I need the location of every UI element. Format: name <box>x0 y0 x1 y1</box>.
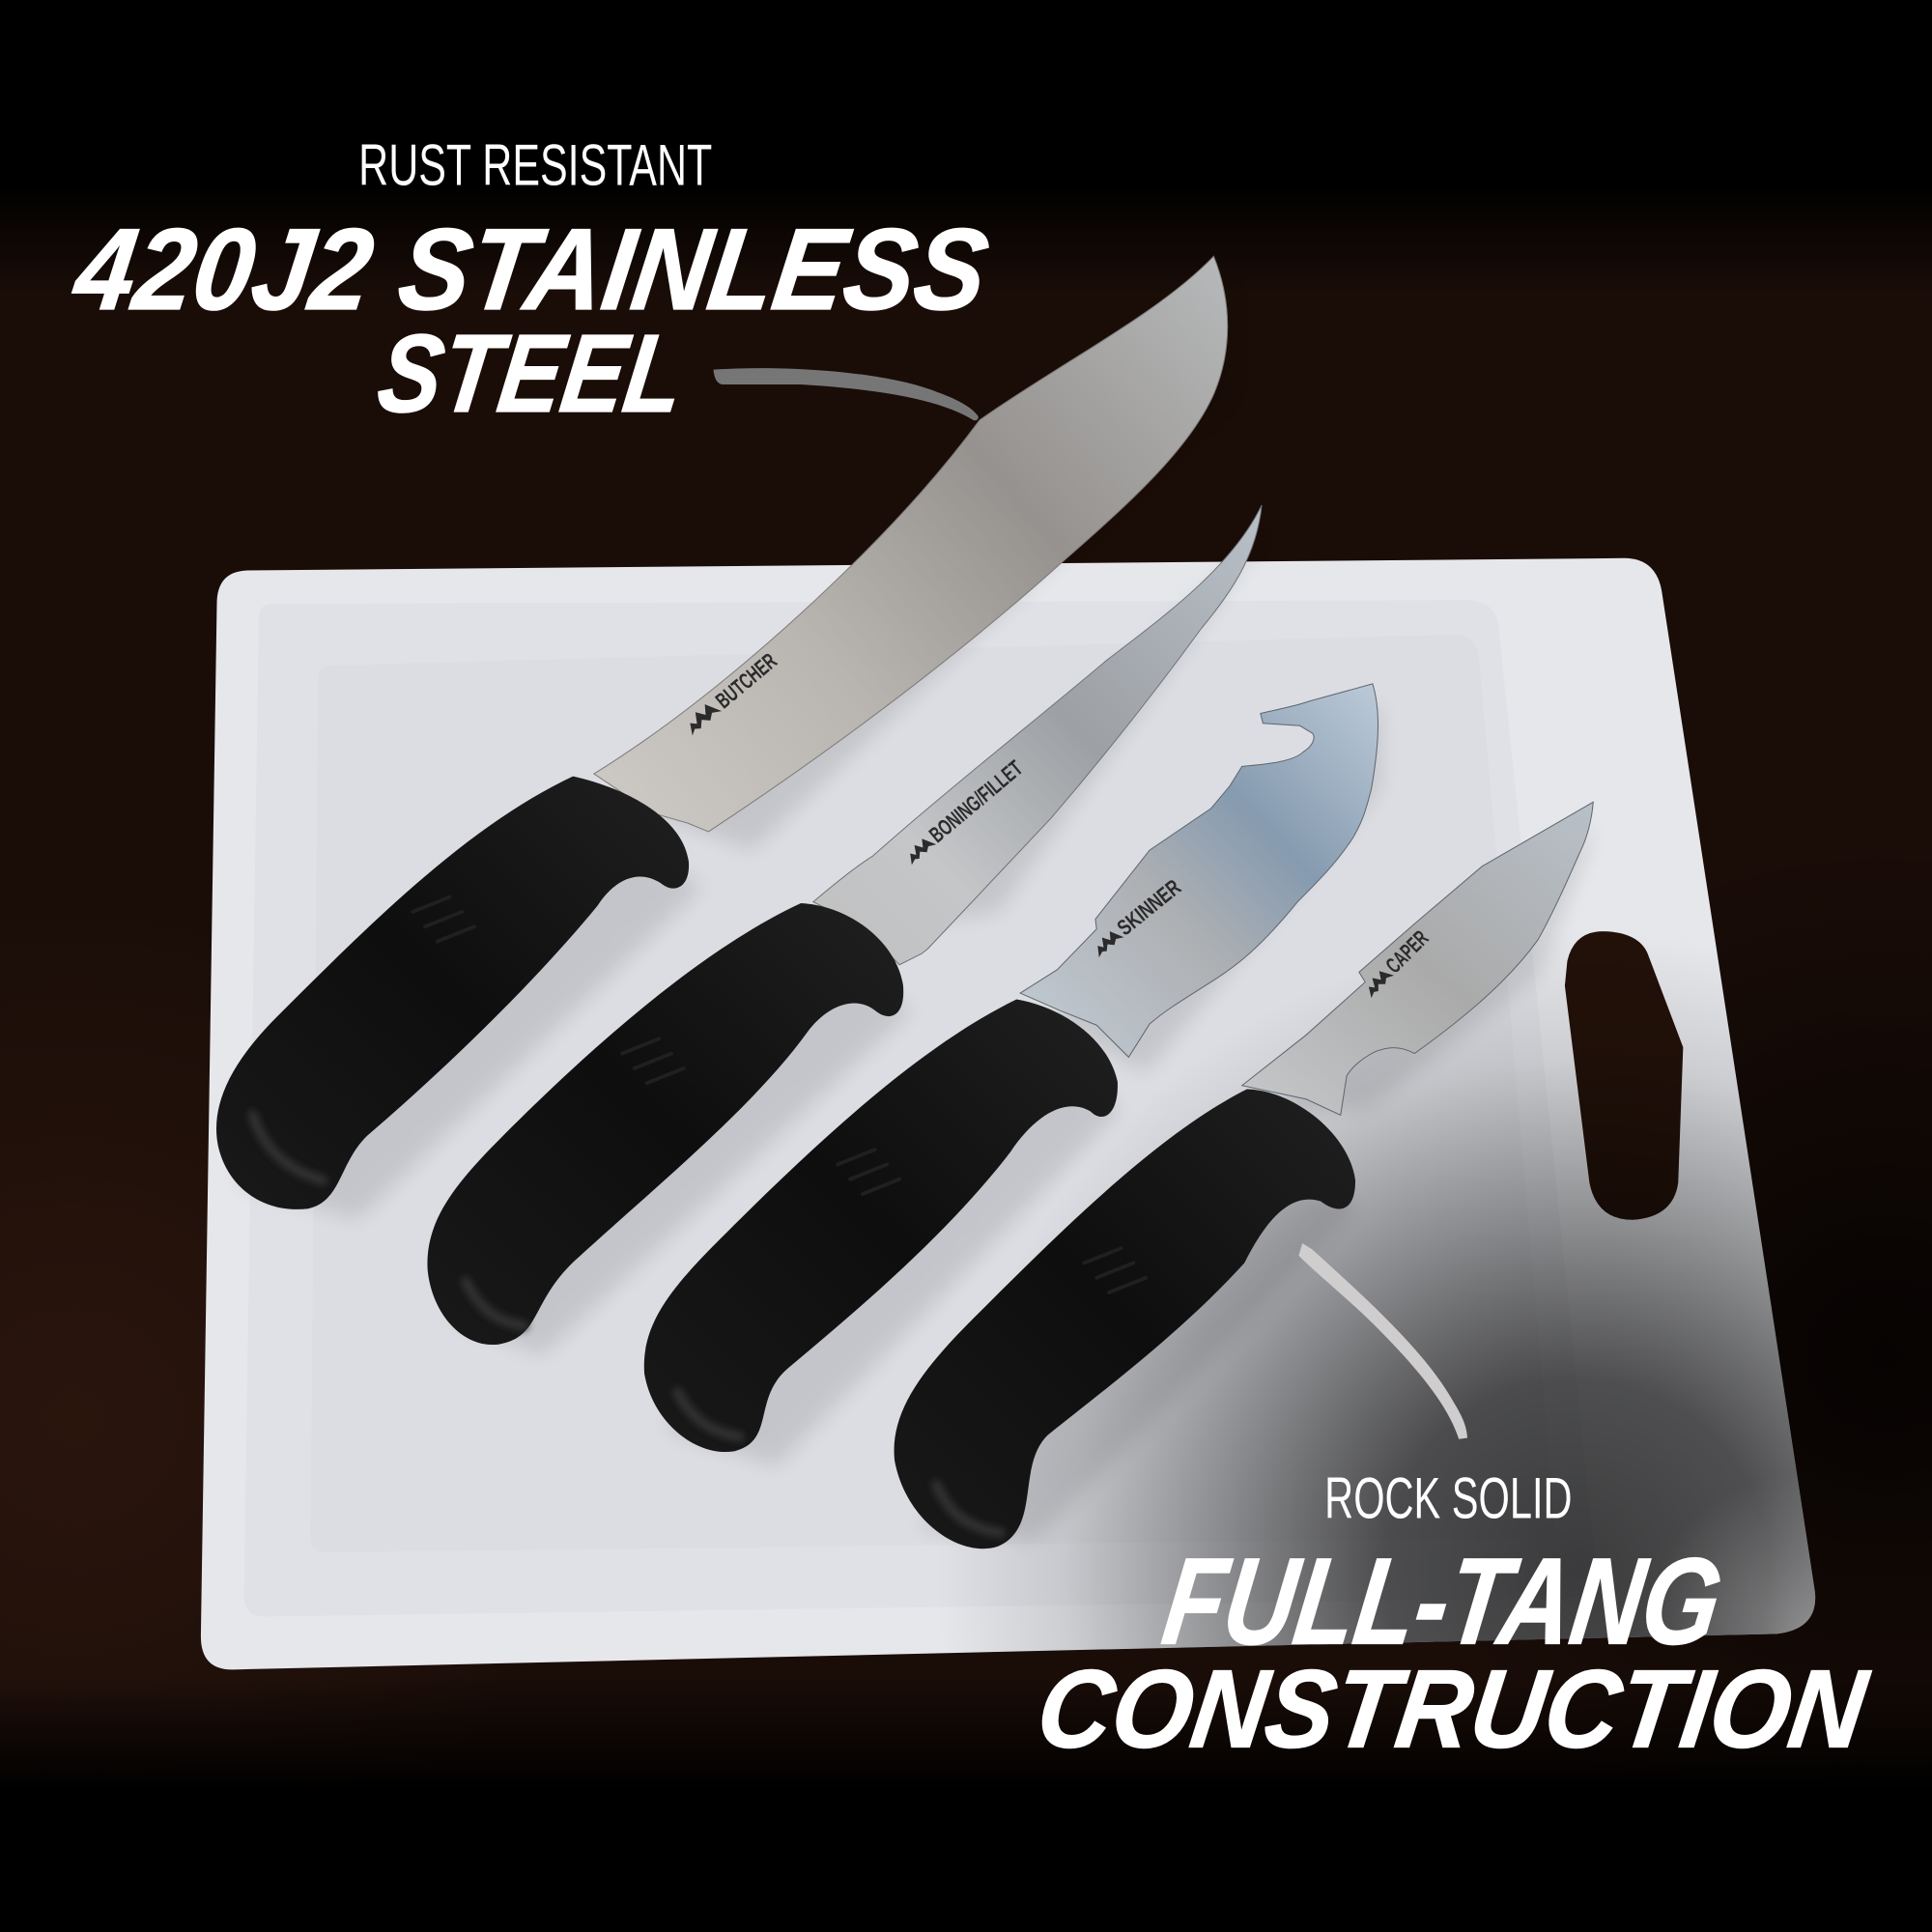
skinner handle <box>644 999 1118 1452</box>
top left callout: 420J2 stainless steel <box>67 132 996 436</box>
arrow stroke to handle <box>1298 1243 1467 1439</box>
boning blade label <box>898 755 1027 868</box>
caper blade <box>1242 802 1593 1115</box>
skinner handle highlight and logo <box>678 1150 899 1436</box>
knife: skinner <box>644 684 1378 1452</box>
label: rust resistant: RUST RESISTANT <box>358 132 712 197</box>
boning blade label: BONING/FILLET <box>924 755 1027 847</box>
juice groove <box>244 600 1597 1616</box>
caper blade label <box>1357 925 1434 1002</box>
caper handle <box>895 1090 1355 1548</box>
arrow stroke to blade <box>714 368 979 420</box>
knife shadows <box>234 283 1596 1540</box>
heading: construction: CONSTRUCTION <box>1031 1648 1876 1772</box>
heading: 420J2 stainless: 420J2 STAINLESS <box>67 205 996 334</box>
butcher blade label: BUTCHER <box>711 648 781 713</box>
caper handle highlight and logo <box>936 1248 1146 1533</box>
bottom right callout: full-tang construction <box>1031 1243 1876 1772</box>
skinner blade label <box>1087 874 1185 961</box>
butcher handle highlight and logo <box>252 897 474 1180</box>
label: rock solid: ROCK SOLID <box>1324 1465 1573 1530</box>
heading: steel: STEEL <box>371 313 692 436</box>
butcher blade <box>594 256 1228 832</box>
butcher blade label <box>679 648 781 739</box>
butcher handle <box>216 777 689 1209</box>
skinner blade <box>1020 684 1378 1057</box>
knife: boning/fillet <box>427 505 1262 1345</box>
board handle hole <box>1565 931 1683 1220</box>
knife: butcher <box>216 256 1228 1209</box>
cutting board <box>201 558 1816 1669</box>
knife: caper <box>895 802 1593 1548</box>
boning handle <box>427 903 903 1345</box>
caper blade label: CAPER <box>1380 925 1434 978</box>
bottom right vignette <box>980 972 1815 1652</box>
skinner blade label: SKINNER <box>1112 874 1185 940</box>
heading: full-tang: FULL-TANG <box>1155 1533 1729 1670</box>
boning blade <box>813 505 1262 965</box>
boning handle highlight and logo <box>466 1038 684 1325</box>
